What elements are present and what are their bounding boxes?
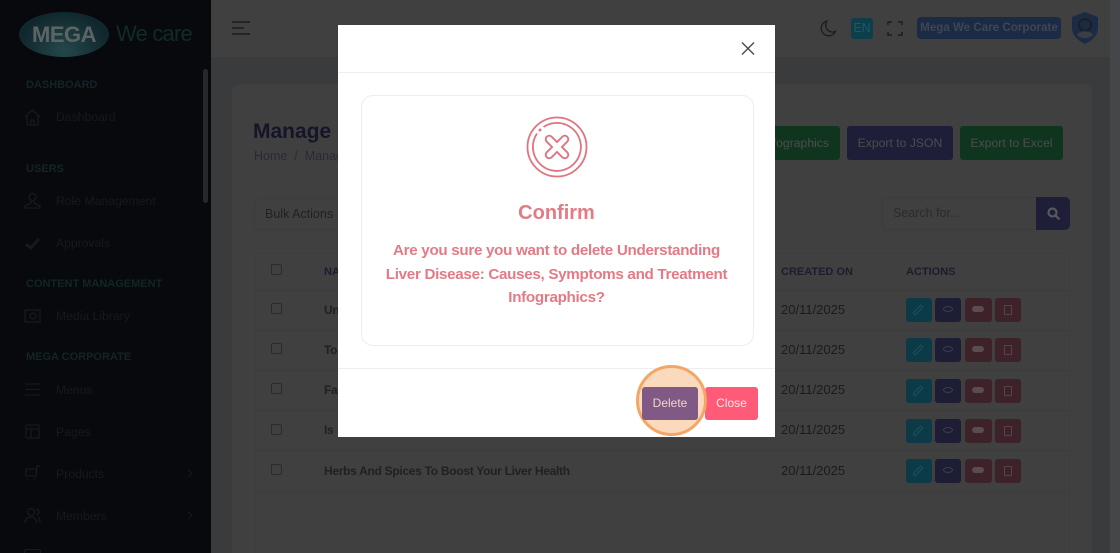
- item: media library: Media Library: [56, 309, 130, 323]
- export json button: [847, 126, 953, 160]
- page title: Manage Infographics: [253, 120, 463, 143]
- icon: menu toggle: [232, 21, 250, 35]
- main content card: [232, 84, 1092, 553]
- icon: error circle x: [526, 116, 588, 178]
- item: role management: Role Management: [56, 194, 156, 208]
- icon: check: [25, 238, 40, 250]
- icon: pages: [26, 424, 40, 438]
- export excel button: [960, 126, 1063, 160]
- top header bar: [211, 0, 1110, 57]
- table rows: Top: [324, 343, 344, 357]
- delete button: [642, 387, 698, 420]
- language badge: EN: [853, 21, 871, 35]
- confirm message: Infographics?: [508, 289, 605, 306]
- icon: search: [1048, 207, 1060, 220]
- confirm message: Are you sure you want to delete Understanding: [393, 242, 720, 259]
- language badge: [851, 18, 873, 39]
- icon: moon: [820, 20, 836, 36]
- search input: [882, 197, 1037, 230]
- confirm modal: [338, 25, 775, 437]
- section: users: USERS: [26, 163, 64, 175]
- table rows: Herbs And Spices To Boost Your Liver Health: [324, 464, 570, 478]
- table rows: Is: [324, 423, 333, 437]
- confirm message: Liver Disease: Causes, Symptoms and Treatment: [386, 266, 727, 283]
- item: approvals: Approvals: [56, 236, 110, 250]
- action buttons: row 2: [906, 338, 1021, 362]
- section: mega corporate: MEGA CORPORATE: [26, 351, 131, 363]
- action buttons: row 4: [906, 419, 1021, 443]
- table rows: NAME: [324, 266, 356, 278]
- section: dashboard: DASHBOARD: [26, 79, 98, 91]
- logo oval: MEGA: [32, 22, 96, 47]
- company badge: Mega We Care Corporate: [920, 21, 1058, 34]
- sidebar scrollbar: [203, 69, 208, 203]
- export json button: Export to JSON: [858, 136, 942, 150]
- icon: home: [25, 110, 40, 126]
- search button: [1036, 197, 1070, 230]
- delete button: Delete: [653, 396, 687, 410]
- item: menus: Menus: [56, 383, 93, 397]
- export excel button: Export to Excel: [971, 136, 1052, 150]
- export infographics button: Export Infographics: [724, 136, 829, 150]
- item: dashboard: Dashboard: [56, 110, 116, 124]
- right edge strip: [1110, 0, 1120, 553]
- icon: close x: [742, 42, 754, 55]
- modal footer divider: [338, 368, 775, 369]
- icon: products: [26, 466, 40, 480]
- icon: chevron products: [188, 470, 192, 477]
- icon: chevron members: [188, 512, 192, 519]
- icon: user shield: [1072, 12, 1098, 44]
- icon: role: [24, 193, 40, 208]
- company badge: [917, 17, 1061, 39]
- table rows: 20/11/2025: [781, 302, 845, 317]
- breadcrumb: Home / Manage Infographics: [254, 149, 421, 163]
- icon: menus: [25, 384, 40, 396]
- logo oval: [19, 12, 109, 57]
- action buttons: row 3: [906, 379, 1021, 403]
- table rows: ACTIONS: [906, 266, 956, 278]
- close button: [705, 387, 758, 420]
- bulk actions select: [254, 198, 354, 230]
- table rows: 20/11/2025: [781, 382, 845, 397]
- search input: Search for...: [893, 206, 960, 220]
- modal inner card: [361, 95, 754, 346]
- table rows: 20/11/2025: [781, 422, 845, 437]
- item: products: Products: [56, 467, 104, 481]
- table rows: Understanding: [324, 303, 405, 317]
- action buttons: row 5: [906, 459, 1021, 483]
- item: pages: Pages: [56, 425, 91, 439]
- item: members: Members: [56, 509, 107, 523]
- highlight circle: [636, 365, 707, 436]
- confirm message: [386, 242, 728, 306]
- table rows: 20/11/2025: [781, 342, 845, 357]
- logo wordmark: We care: [116, 21, 192, 46]
- icon: members: [24, 508, 40, 523]
- section: content management: CONTENT MANAGEMENT: [26, 278, 162, 290]
- logo: [19, 12, 192, 57]
- page background: [211, 57, 1120, 553]
- confirm heading: Confirm: [518, 202, 595, 224]
- icon: fullscreen: [887, 21, 903, 36]
- bulk actions select: Bulk Actions: [265, 207, 333, 221]
- export infographics button: [700, 126, 840, 160]
- icon: media: [24, 310, 40, 322]
- close button: Close: [716, 396, 747, 410]
- table frame: [255, 253, 1070, 553]
- sidebar: [0, 0, 211, 553]
- table rows: 20/11/2025: [781, 463, 845, 478]
- table rows: CREATED ON: [781, 266, 853, 278]
- action buttons: row 1: [906, 298, 1021, 322]
- modal header divider: [338, 72, 775, 73]
- icon: partial next item: [24, 549, 41, 553]
- table rows: Fatty: [324, 383, 351, 397]
